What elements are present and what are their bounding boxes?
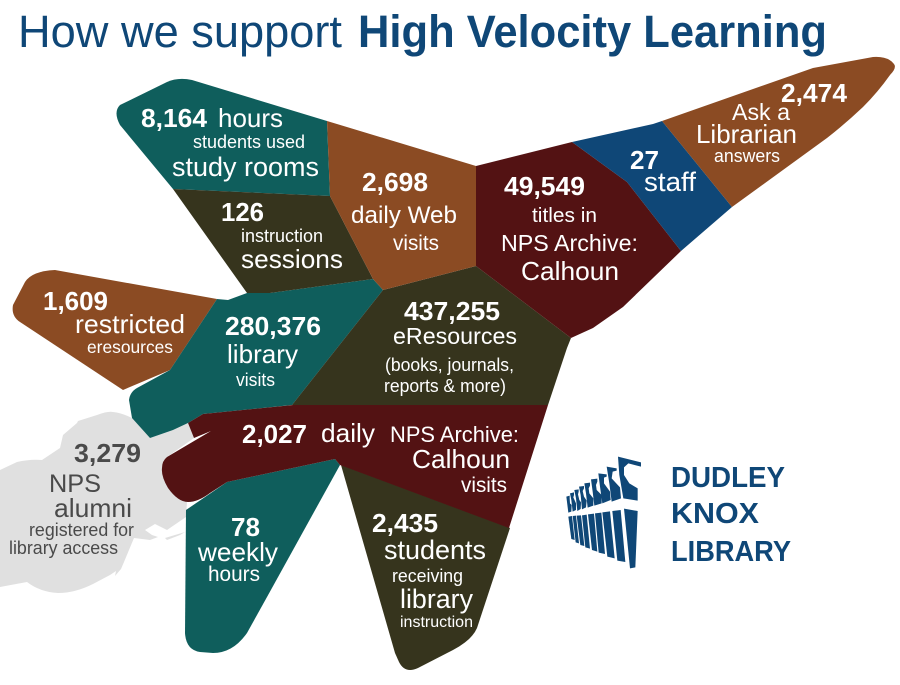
- panel: instruction sessions: [173, 189, 373, 293]
- panel: study rooms hours: hours: [218, 103, 283, 133]
- panel: NPS alumni (grey blob): registered for: [29, 520, 134, 540]
- panel: restricted eresources: 1,609: [43, 286, 108, 316]
- panel: Ask a Librarian answers: 2,474: [781, 78, 848, 108]
- panel: NPS alumni (grey blob): NPS: [49, 470, 101, 498]
- panel: students receiving library instruction: receiving: [392, 566, 463, 586]
- panel: Ask a Librarian answers: answers: [714, 146, 780, 166]
- panel: daily Web visits: [327, 121, 476, 290]
- panel: students receiving library instruction: instruction: [400, 614, 473, 631]
- panel: staff: staff: [644, 167, 696, 197]
- panel: daily Web visits: 2,698: [362, 167, 428, 197]
- panel: study rooms hours: students used: [193, 132, 305, 152]
- panel: students receiving library instruction: students: [384, 535, 486, 565]
- logo wordmark: [671, 462, 791, 568]
- logo wordmark: KNOX: [671, 498, 760, 530]
- panel: NPS alumni (grey blob): 3,279: [74, 438, 141, 468]
- panel: weekly hours: 78: [231, 512, 260, 542]
- panel: daily Web visits: visits: [393, 232, 439, 255]
- panel: NPS alumni (grey blob): library access: [9, 538, 118, 558]
- panel: titles in NPS Archive: Calhoun: [521, 256, 619, 286]
- panel: eResources: reports & more): [384, 376, 506, 396]
- title: [18, 6, 827, 57]
- panel: Ask a Librarian answers: Librarian: [696, 119, 797, 149]
- panel: daily Web visits: daily Web: [351, 202, 457, 229]
- panel: study rooms hours: 8,164: [141, 103, 208, 133]
- panel: Ask a Librarian answers: Ask a: [732, 99, 790, 125]
- panel: titles in NPS Archive: 49,549: [504, 171, 585, 201]
- panel: daily NPS Archive visits: NPS Archive:: [390, 422, 519, 447]
- logo wordmark: LIBRARY: [671, 536, 791, 568]
- panel: instruction sessions: sessions: [241, 244, 343, 274]
- panel: library visits: [129, 279, 383, 438]
- panel: daily NPS Archive visits: visits: [461, 474, 507, 497]
- panel: weekly hours: weekly: [197, 537, 278, 567]
- panel: weekly hours: hours: [208, 563, 260, 586]
- panel: eResources: [292, 266, 571, 405]
- panel: daily NPS Archive visits: [162, 405, 548, 528]
- panel: students receiving library instruction: [341, 465, 510, 670]
- panel: Ask a Librarian answers: [662, 57, 895, 207]
- title: How we support: [18, 6, 342, 57]
- panel: instruction sessions: instruction: [241, 226, 323, 246]
- panel: NPS alumni (grey blob): [0, 412, 194, 593]
- panel: library visits: visits: [236, 370, 275, 390]
- logo wordmark: DUDLEY: [671, 462, 785, 494]
- panel: students receiving library instruction: library: [400, 584, 473, 614]
- panel: study rooms hours: [116, 79, 330, 196]
- panel: eResources: eResources: [393, 323, 517, 349]
- panel: titles in NPS Archive: [476, 142, 681, 338]
- panel: restricted eresources: restricted: [75, 309, 185, 339]
- panel: library visits: library: [227, 339, 298, 369]
- panel: daily NPS Archive visits: daily: [321, 418, 375, 448]
- panel: weekly hours: [185, 459, 340, 653]
- title: High Velocity Learning: [358, 6, 827, 57]
- panel: daily NPS Archive visits: 2,027: [242, 419, 307, 449]
- panel: students receiving library instruction: 2,435: [372, 508, 438, 538]
- panel: staff: [572, 121, 732, 251]
- panel: eResources: (books, journals,: [385, 355, 514, 375]
- icon: library columns: [566, 457, 641, 568]
- panel: restricted eresources: eresources: [87, 337, 173, 357]
- panel: instruction sessions: 126: [221, 197, 264, 227]
- logo: Dudley Knox Library: [566, 457, 791, 568]
- panel: titles in NPS Archive: titles in: [532, 204, 597, 227]
- panel: titles in NPS Archive: NPS Archive:: [501, 230, 638, 256]
- panel: daily NPS Archive visits: Calhoun: [412, 444, 510, 474]
- panel: restricted eresources: [13, 270, 217, 390]
- panel: NPS alumni (grey blob): alumni: [54, 493, 132, 523]
- panel: study rooms hours: study rooms: [172, 152, 319, 182]
- panel: staff: 27: [630, 145, 659, 175]
- panel: library visits: 280,376: [225, 311, 321, 341]
- panel: eResources: 437,255: [404, 296, 500, 326]
